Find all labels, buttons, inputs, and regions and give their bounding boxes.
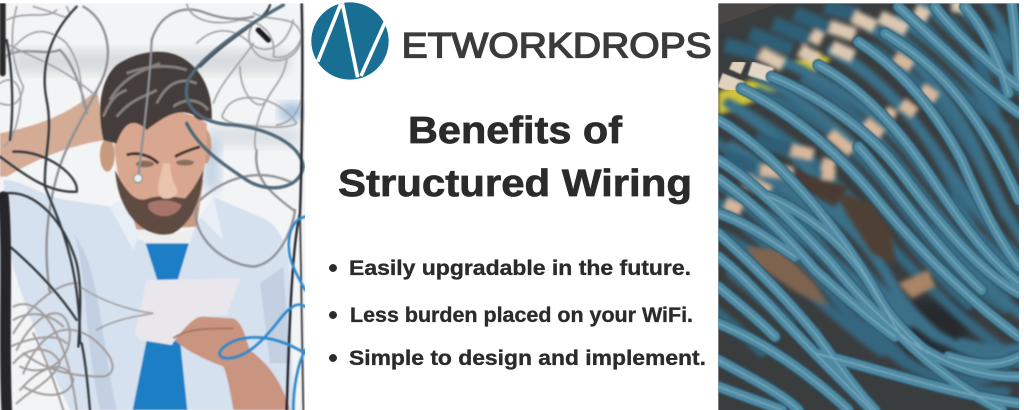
bullet 3: Simple to design and implement.: [349, 347, 706, 370]
blurred connectors: [725, 5, 968, 210]
wire plugs: [134, 174, 142, 183]
wires: [0, 3, 305, 410]
blue wires: [220, 217, 305, 410]
cable photo background: [715, 0, 1020, 410]
photo: frustrated technician tangled in wires: [0, 0, 305, 410]
hair: [100, 52, 212, 143]
bullet 2: Less burden placed on your WiFi.: [350, 304, 693, 327]
heading: [338, 110, 692, 205]
forearm and hand: [173, 317, 290, 410]
blue-grey cable: [186, 5, 303, 188]
yellow label: [718, 53, 832, 115]
thin grey wires: [0, 3, 303, 330]
rack cables on edges: [287, 3, 302, 410]
front connectors: [720, 63, 772, 88]
wire tangle bottom left: [10, 283, 113, 410]
beard: [115, 170, 203, 235]
teal cable bundle: [718, 3, 1019, 410]
brown background patches: [745, 170, 935, 307]
dark wires: [0, 5, 270, 410]
logo mark: [311, 2, 389, 80]
nose shadow: [158, 163, 178, 199]
heading: Structured Wiring: [338, 163, 692, 205]
shirt: [3, 180, 293, 410]
grey wires: [0, 7, 295, 293]
logo: [311, 2, 712, 80]
logo wordmark: ETWORKDROPS: [402, 26, 712, 65]
brows and eyes: [127, 154, 158, 163]
collar: [135, 228, 195, 243]
photo: bundled teal network cables: [705, 0, 1024, 410]
neck: [123, 180, 203, 230]
raised arm: [0, 90, 107, 177]
sheet of paper: [135, 278, 240, 345]
t-shirt: [133, 242, 189, 410]
benefits list: [329, 257, 706, 370]
top corner panel: [718, 3, 778, 25]
blurred background cables: [705, 0, 1024, 392]
face: [113, 112, 208, 200]
photo background: [0, 0, 305, 410]
technician: [0, 52, 293, 410]
heading: Benefits of: [408, 110, 622, 152]
bullet 1: Easily upgradable in the future.: [349, 257, 691, 280]
ears: [100, 138, 115, 172]
